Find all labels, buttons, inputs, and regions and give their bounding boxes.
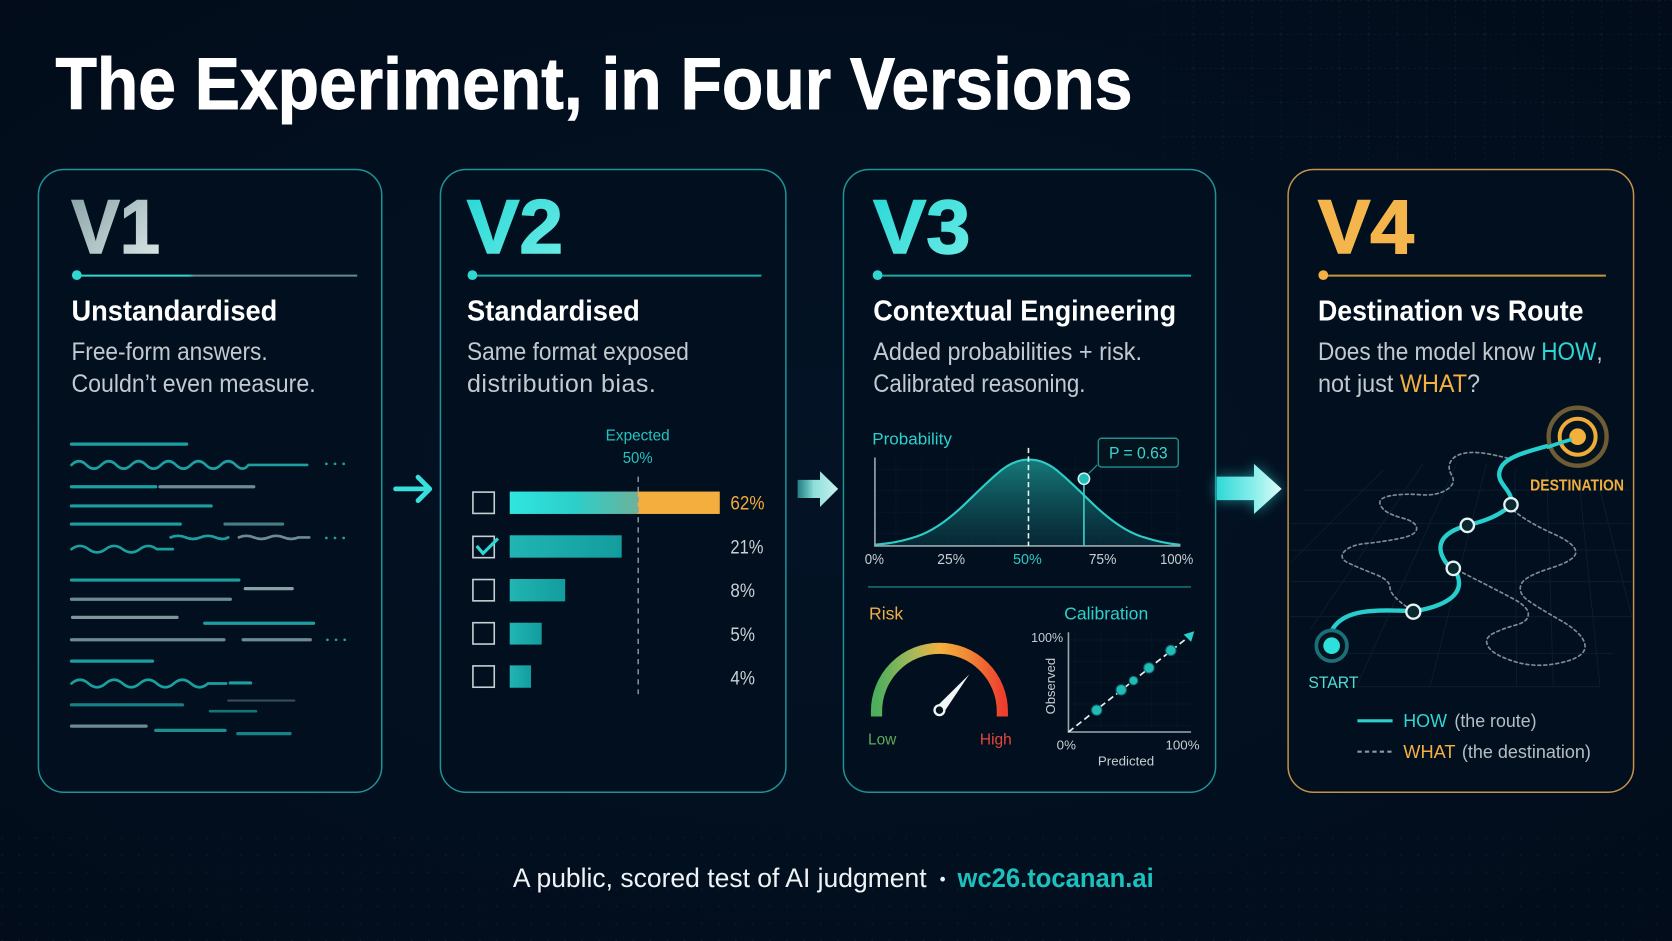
chart: probability curve: Probability [872, 430, 952, 449]
start marker [1316, 630, 1347, 661]
title: The Experiment, in Four Versions [55, 42, 1132, 125]
description V4: not just WHAT? [1318, 370, 1480, 398]
callout P = 0.63: P = 0.63 [1109, 444, 1168, 463]
version label V4: V4 [1318, 185, 1414, 270]
footer [513, 863, 1154, 893]
route waypoints [1406, 498, 1518, 619]
gauge: risk: Risk [869, 604, 903, 624]
axis labels: 25% [937, 551, 965, 568]
axis labels: 75% [1089, 551, 1116, 568]
arrow: V2 to V3 [798, 471, 838, 507]
gauge: risk: High [980, 731, 1012, 748]
percentage labels: 21% [730, 537, 763, 558]
axis labels: 0% [865, 551, 884, 568]
footer: A public, scored test of AI judgment [513, 863, 927, 893]
rule V1 [72, 270, 357, 280]
chart: calibration [1031, 604, 1200, 769]
axis labels [865, 551, 1193, 568]
panel: V1 unstandardised [38, 170, 382, 792]
chart: calibration: 100% [1031, 630, 1063, 645]
legend: WHAT [1403, 742, 1456, 762]
card frame V4 [1288, 170, 1634, 792]
start label: START [1308, 673, 1358, 692]
heading V1: Unstandardised [71, 295, 277, 327]
bar chart: distribution bias [473, 427, 765, 694]
description V2: distribution bias. [467, 370, 656, 398]
legend: (the route) [1454, 711, 1537, 731]
destination label: DESTINATION [1530, 477, 1624, 494]
rule V3 [873, 270, 1191, 280]
version label V2: V2 [467, 185, 563, 270]
card frame V3 [843, 170, 1216, 792]
footer: wc26.tocanan.ai [957, 863, 1154, 893]
description V2 [467, 338, 689, 398]
card frame V2 [440, 170, 786, 792]
percentage labels: 62% [730, 494, 765, 515]
axis labels: 100% [1160, 551, 1193, 568]
description V4 [1318, 338, 1603, 398]
card frame V1 [38, 170, 382, 792]
version label V3: V3 [873, 185, 970, 270]
rule V2 [467, 270, 761, 280]
expected 50% label: Expected [606, 427, 670, 444]
percentage labels [730, 494, 765, 690]
heading V4: Destination vs Route [1318, 295, 1583, 327]
percentage labels: 5% [730, 625, 755, 646]
axis labels: 50% [1013, 551, 1042, 568]
description V1: Couldn’t even measure. [71, 370, 316, 398]
percentage labels: 8% [730, 581, 755, 602]
chart: calibration: Predicted [1098, 754, 1154, 769]
checkboxes [473, 492, 498, 687]
heading V2: Standardised [467, 295, 640, 327]
arrow: V3 to V4 [1217, 464, 1282, 514]
panel: V4 destination vs route [1288, 170, 1634, 792]
description V2: Same format exposed [467, 338, 689, 366]
panel: V3 contextual engineering [843, 170, 1216, 792]
percentage labels: 4% [730, 669, 755, 690]
legend: (the destination) [1462, 742, 1591, 762]
arrow: V1 to V2 [396, 477, 430, 501]
description V1 [71, 338, 316, 398]
description V3 [873, 338, 1142, 398]
destination marker [1547, 408, 1607, 466]
chart: calibration: Calibration [1064, 604, 1148, 624]
chart: calibration: 0% [1057, 738, 1076, 753]
description V3: Calibrated reasoning. [873, 370, 1086, 398]
description V4: Does the model know HOW, [1318, 338, 1603, 366]
callout P = 0.63 [1098, 438, 1178, 467]
description V1: Free-form answers. [71, 338, 268, 366]
legend: HOW [1403, 711, 1448, 731]
description V3: Added probabilities + risk. [873, 338, 1142, 366]
expected 50% label [606, 427, 670, 467]
chart: calibration: 100% [1166, 738, 1200, 753]
panel: V2 standardised [440, 170, 786, 792]
dashed WHAT paths [1342, 452, 1585, 665]
gauge: risk [868, 604, 1012, 748]
chart: probability curve [865, 430, 1193, 568]
legend [1357, 711, 1591, 762]
rule V4 [1318, 270, 1606, 280]
gauge: risk: Low [868, 731, 897, 748]
scribbled free-form lines [71, 444, 347, 734]
heading V3: Contextual Engineering [873, 295, 1176, 327]
route map [1290, 408, 1632, 687]
bars [510, 492, 720, 688]
expected 50% label: 50% [623, 450, 653, 467]
chart: calibration: Observed [1043, 658, 1058, 714]
version label V1: V1 [71, 185, 160, 270]
solid HOW route [1332, 437, 1578, 631]
